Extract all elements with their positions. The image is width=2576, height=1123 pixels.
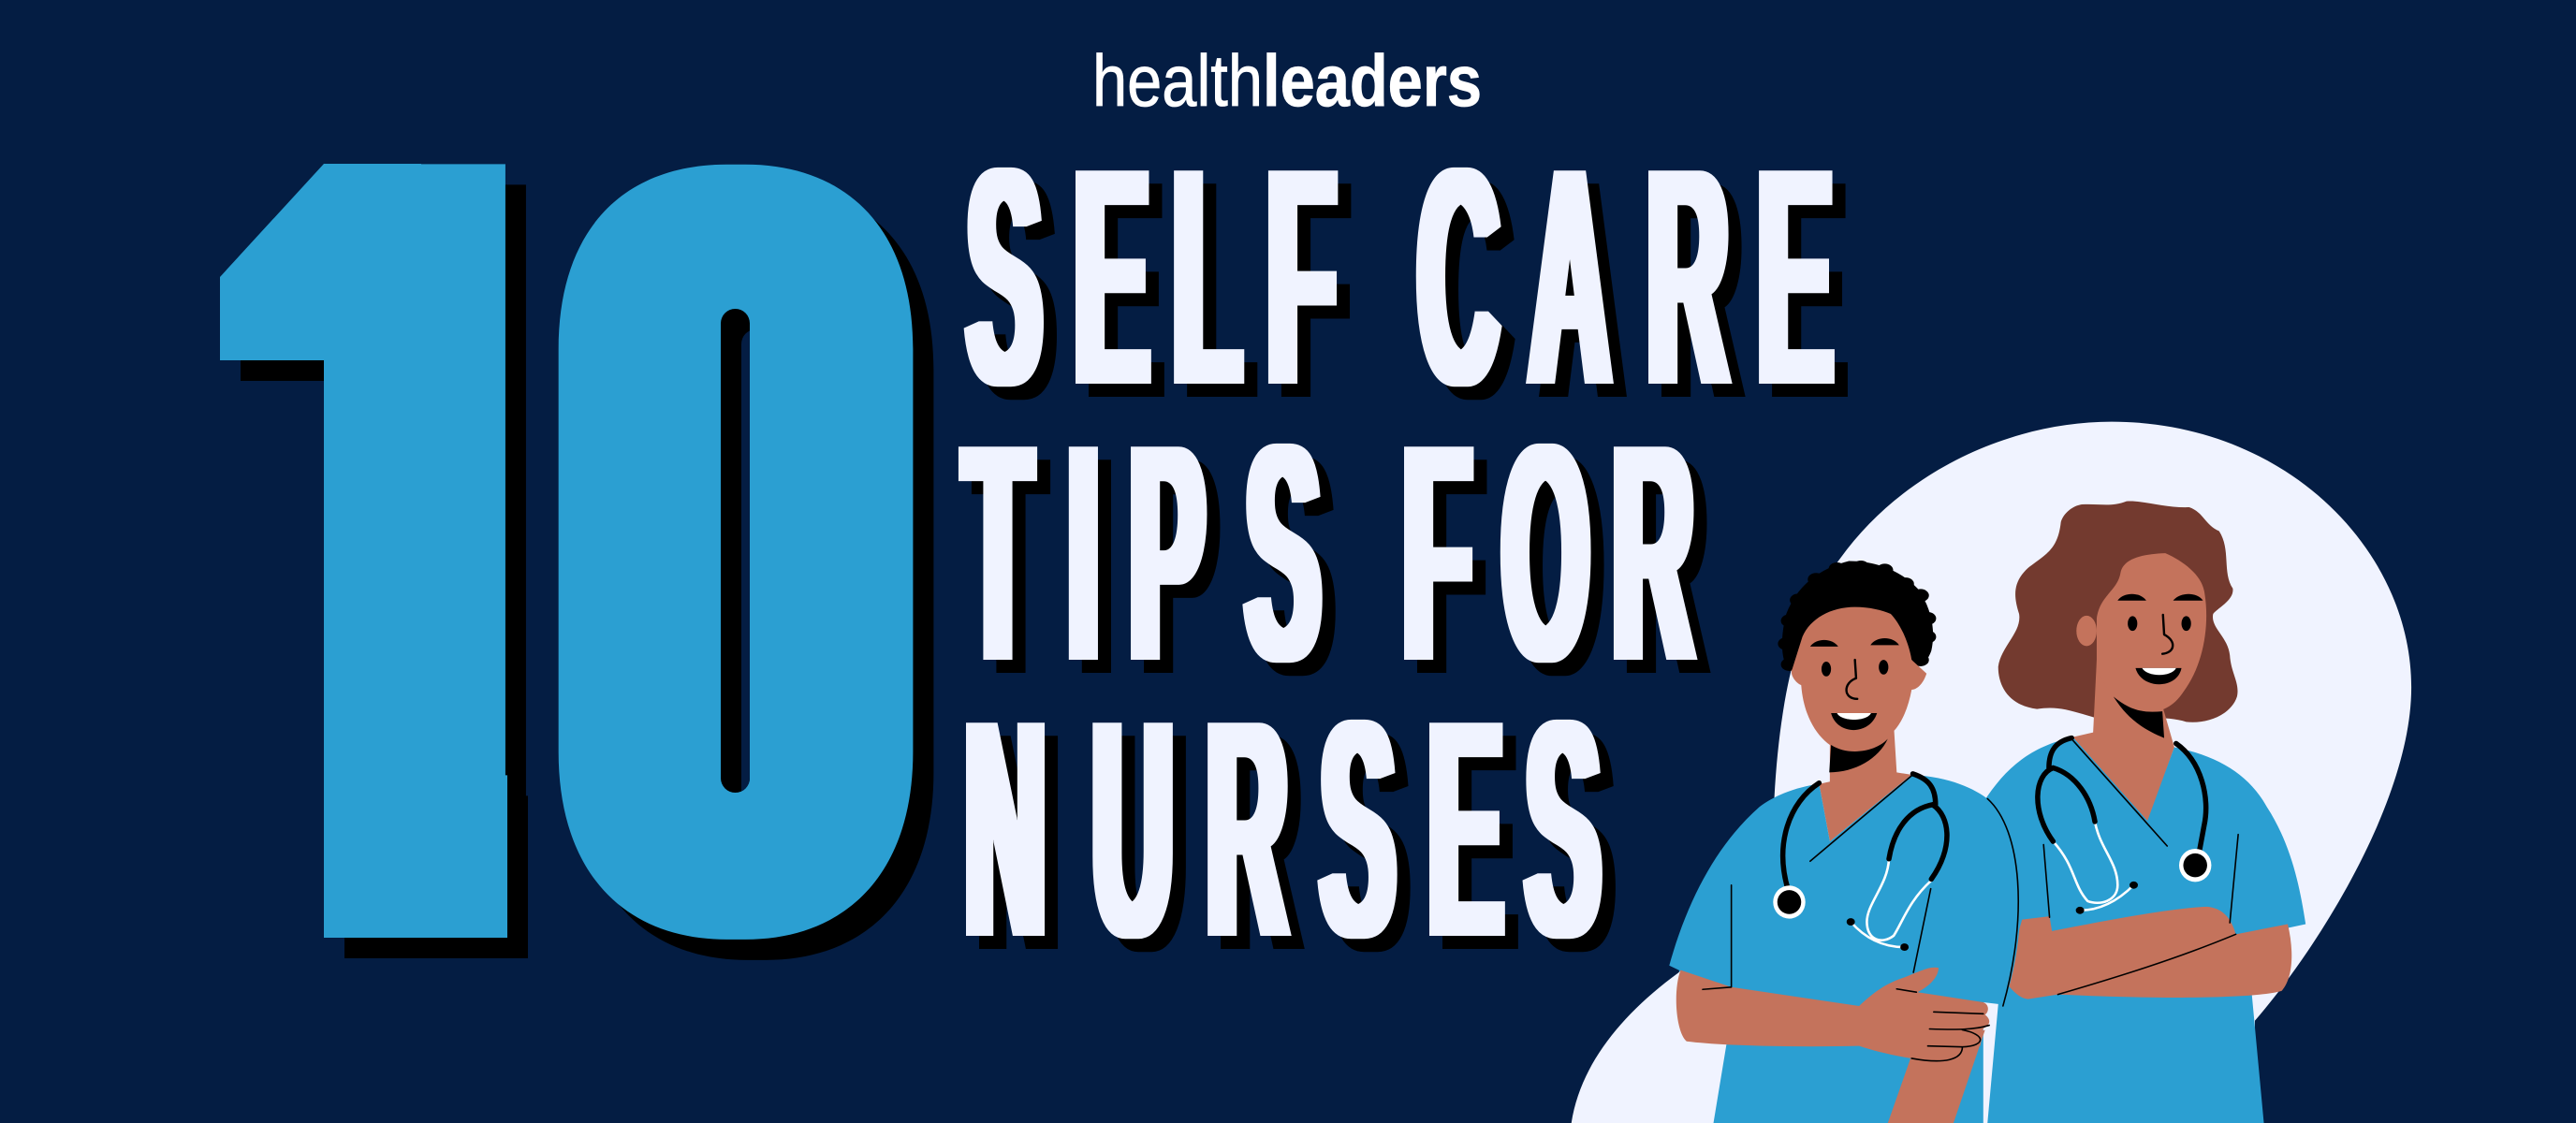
scrub lines	[2043, 740, 2238, 995]
arm and hand	[1676, 968, 1989, 1059]
neck shadow	[1829, 739, 1888, 772]
stethoscope	[2038, 738, 2211, 914]
counter of the 0	[721, 309, 750, 793]
forearm	[1888, 1029, 1985, 1123]
neck and chest	[1819, 724, 1911, 841]
digit 0: 0	[542, 158, 929, 874]
facial features	[2117, 594, 2203, 684]
face	[1792, 607, 1926, 752]
hair	[1778, 561, 1936, 671]
scrub top	[1669, 775, 2020, 1123]
title line 3: NURSES	[965, 656, 1601, 1002]
backdrop blob	[1572, 422, 2411, 1123]
title line 1: SELF CARE	[967, 104, 1833, 450]
title: self care tips for nurses	[964, 104, 1833, 1002]
digit 1	[220, 164, 528, 958]
hair	[1998, 501, 2237, 722]
stethoscope	[1773, 774, 1947, 951]
face	[2097, 553, 2206, 712]
scrub top	[1983, 737, 2305, 1123]
neck shadow	[2114, 696, 2164, 738]
illustration: two nurses with backdrop	[1572, 422, 2411, 1123]
facial features	[1810, 638, 1899, 730]
nurse left	[1669, 561, 2020, 1123]
nurse right	[1983, 501, 2305, 1123]
logo: healthleaders: healthleaders	[1092, 39, 1482, 122]
neck and chest	[2072, 660, 2174, 823]
big number 10	[220, 164, 934, 960]
ear	[2076, 616, 2097, 646]
title line 2: TIPS FOR	[964, 380, 1693, 726]
crossed arms	[2004, 907, 2291, 999]
scrub lines	[1703, 776, 2018, 1061]
